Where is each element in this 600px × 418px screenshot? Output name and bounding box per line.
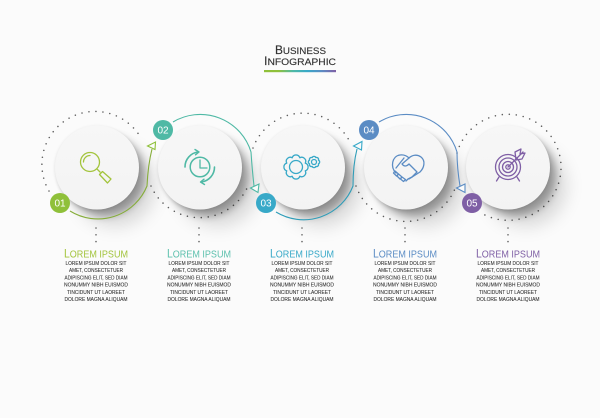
step 2 text: LOREM IPSUM DOLOR SIT (168, 261, 230, 267)
step 2 text: LOREM IPSUM (167, 248, 231, 260)
step 1 text: NONUMMY NIBH EUISMOD (64, 282, 128, 288)
step 2 text: NONUMMY NIBH EUISMOD (167, 282, 231, 288)
step 1 text: LOREM IPSUM (64, 248, 128, 260)
circle 5 (466, 126, 550, 210)
step 5 text: DOLORE MAGNA ALIQUAM (476, 297, 540, 303)
step 5 text (476, 248, 540, 303)
step 5 text: ADIPISCING ELIT, SED DIAM (476, 275, 540, 281)
badge 02 (153, 120, 173, 140)
step 1 text: ADIPISCING ELIT, SED DIAM (64, 275, 128, 281)
step 4 text: ADIPISCING ELIT, SED DIAM (374, 275, 437, 281)
icon: magnifier (80, 152, 111, 183)
step 1 text: AMET, CONSECTETUER (69, 268, 123, 274)
circle 4 (364, 126, 448, 210)
dotted rings (42, 111, 561, 221)
shadows (63, 134, 566, 226)
badge 02: 02 (157, 126, 169, 136)
title: BUSINESS (275, 45, 326, 57)
step 4 text: TINCIDUNT UT LAOREET (376, 290, 434, 296)
step 2 text: TINCIDUNT UT LAOREET (170, 290, 228, 296)
step 4 text: NONUMMY NIBH EUISMOD (373, 282, 437, 288)
step 4 text: LOREM IPSUM DOLOR SIT (374, 261, 436, 267)
step 5 text: AMET, CONSECTETUER (481, 268, 535, 274)
title underline (264, 70, 336, 72)
step 1 text (64, 248, 128, 303)
step 3 text: ADIPISCING ELIT, SED DIAM (270, 275, 334, 281)
arrow 1 (70, 142, 156, 219)
badge 03: 03 (260, 198, 272, 210)
arrow 3 (276, 142, 362, 220)
step 3 text: LOREM IPSUM DOLOR SIT (272, 261, 333, 267)
step 4 text: LOREM IPSUM (373, 248, 437, 260)
step 1 text: LOREM IPSUM DOLOR SIT (66, 261, 127, 267)
title: INFOGRAPHIC (264, 56, 336, 68)
icon: clock with arrows (185, 150, 215, 184)
step 4 text (373, 248, 437, 303)
step 5 text: LOREM IPSUM (476, 248, 540, 260)
icon: handshake heart (393, 155, 424, 182)
circle 3 (261, 126, 345, 210)
step 4 text: AMET, CONSECTETUER (378, 268, 432, 274)
step 2 text: AMET, CONSECTETUER (172, 268, 226, 274)
icon: gears (284, 155, 320, 179)
step 3 text: NONUMMY NIBH EUISMOD (270, 282, 334, 288)
badge 04 (359, 120, 379, 140)
step 3 text: DOLORE MAGNA ALIQUAM (270, 297, 334, 303)
circle 1 (55, 126, 139, 210)
badge 04: 04 (363, 126, 375, 136)
badge 05 (462, 193, 482, 213)
badge 01 (50, 193, 70, 213)
badge 01: 01 (54, 198, 66, 210)
step 5 text: LOREM IPSUM DOLOR SIT (478, 261, 539, 267)
step 4 text: DOLORE MAGNA ALIQUAM (374, 297, 437, 303)
arrow 2 (173, 114, 259, 192)
step 2 text: DOLORE MAGNA ALIQUAM (168, 297, 231, 303)
step 1 text: DOLORE MAGNA ALIQUAM (64, 297, 128, 303)
icon: target (496, 149, 525, 181)
step 3 text: LOREM IPSUM (270, 248, 334, 260)
title (264, 45, 336, 68)
step 3 text (270, 248, 334, 303)
step 5 text: NONUMMY NIBH EUISMOD (476, 282, 540, 288)
step 5 text: TINCIDUNT UT LAOREET (479, 290, 537, 296)
step 3 text: AMET, CONSECTETUER (275, 268, 329, 274)
badge 03 (256, 193, 276, 213)
step 2 text (167, 248, 231, 303)
arrow 4 (379, 114, 465, 192)
badge 05: 05 (466, 198, 478, 210)
step 1 text: TINCIDUNT UT LAOREET (67, 290, 125, 296)
drop lines (96, 228, 508, 242)
step 2 text: ADIPISCING ELIT, SED DIAM (168, 275, 231, 281)
step 3 text: TINCIDUNT UT LAOREET (273, 290, 331, 296)
circle 2 (158, 126, 242, 210)
